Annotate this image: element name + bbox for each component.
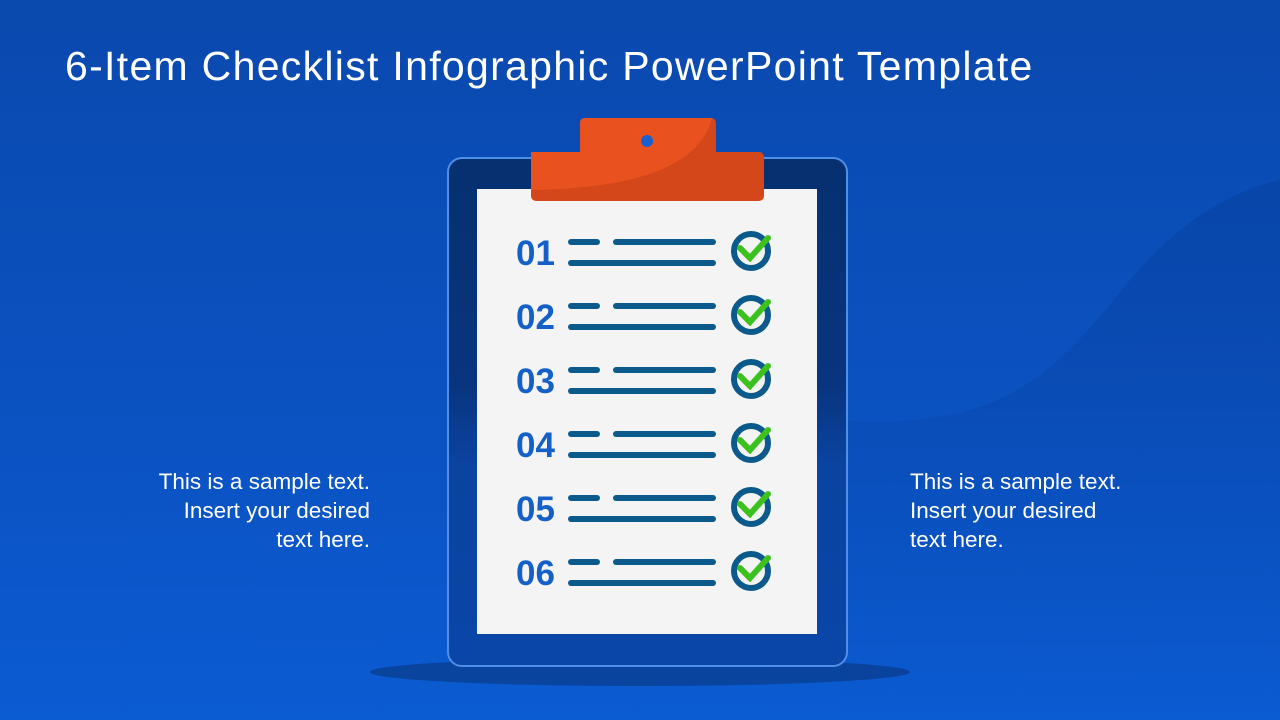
left text (159, 469, 370, 552)
row 01 (516, 234, 768, 273)
paper (477, 189, 817, 634)
right text: This is a sample text. (910, 469, 1121, 494)
title: 6-Item Checklist Infographic PowerPoint Template (65, 43, 1034, 89)
row 03 (516, 362, 768, 401)
row 02: 02 (516, 298, 555, 337)
row 06 (516, 554, 768, 593)
row 04: 04 (516, 426, 555, 465)
right text: Insert your desired (910, 498, 1096, 523)
row 06: 06 (516, 554, 555, 593)
board (448, 158, 847, 666)
row 02 (516, 298, 768, 337)
right text (910, 469, 1121, 552)
row 05: 05 (516, 490, 555, 529)
row 03: 03 (516, 362, 555, 401)
left text: This is a sample text. (159, 469, 370, 494)
clip (531, 118, 764, 201)
left text: text here. (276, 527, 370, 552)
row 05 (516, 490, 768, 529)
right text: text here. (910, 527, 1004, 552)
row 04 (516, 426, 768, 465)
left text: Insert your desired (184, 498, 370, 523)
row 01: 01 (516, 234, 555, 273)
